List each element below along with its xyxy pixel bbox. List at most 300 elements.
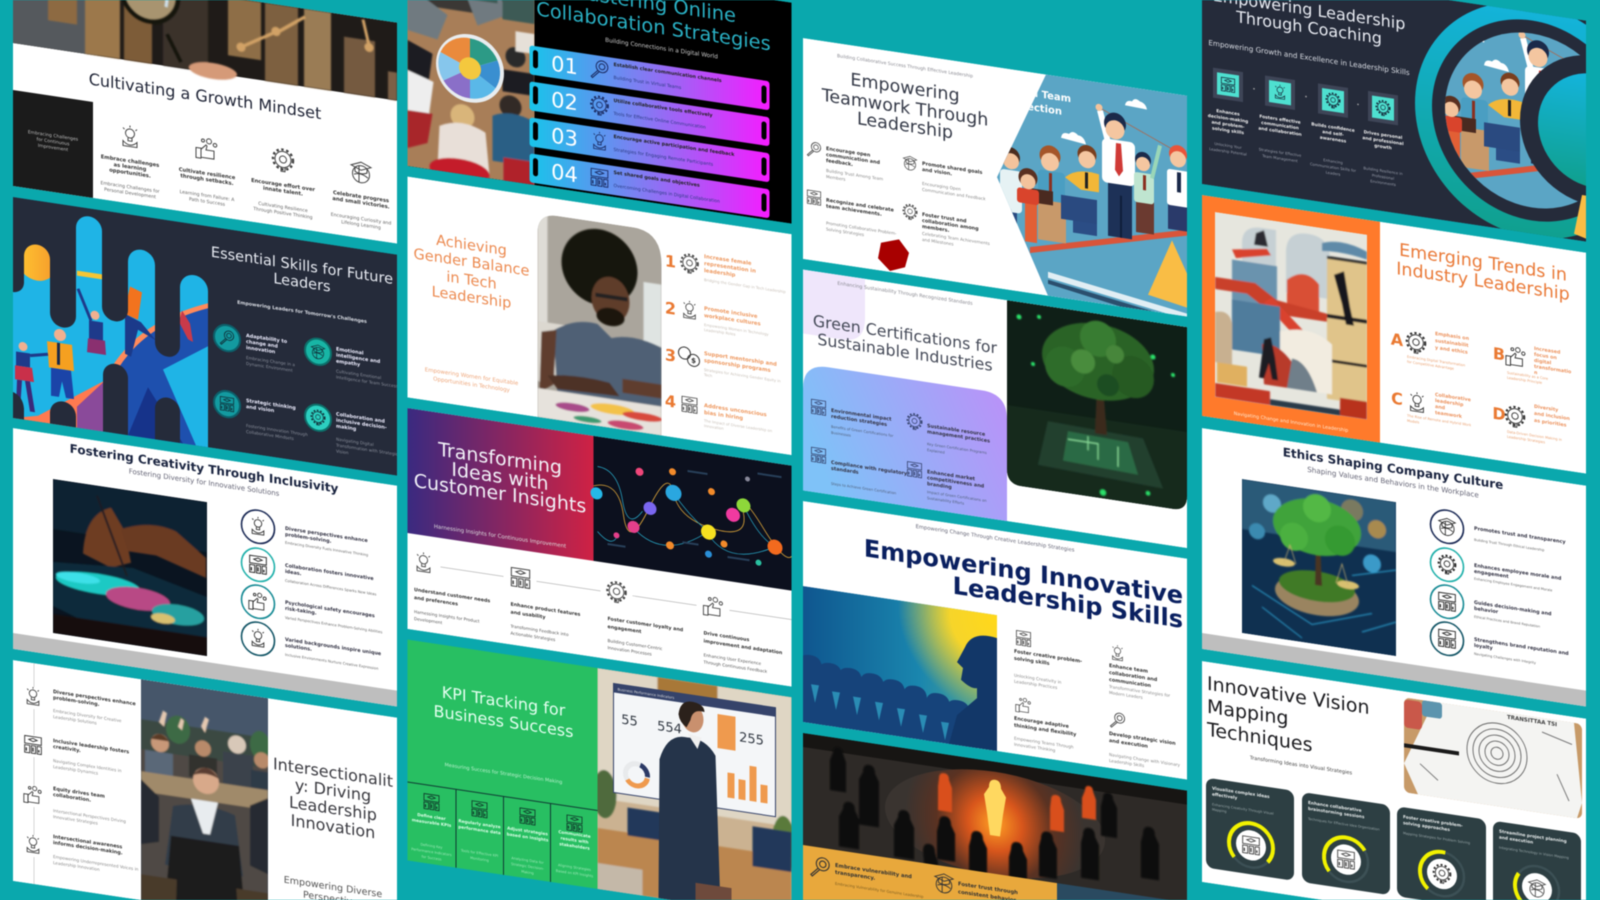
item: reputation <box>1430 620 1569 674</box>
card 2 <box>1302 792 1390 897</box>
title: Emerging Trends in <box>1399 241 1567 286</box>
item: trust and collaboration: Celebrating Team Achievements <box>922 231 990 246</box>
step 2: communication <box>1261 120 1299 132</box>
item: resilience: Cultivate resilience <box>179 167 236 181</box>
item A: A <box>1391 329 1404 350</box>
item: resilience: through setbacks. <box>180 173 234 187</box>
step 2: Fosters effective <box>1259 114 1301 126</box>
item 1: representation in <box>704 261 756 275</box>
item: collaboration: Navigating Digital <box>336 436 374 447</box>
item: inclusive leadership: creativity. <box>53 744 81 754</box>
item: morale: Enhances employee morale and <box>1474 563 1562 582</box>
subtitle: Empowering Growth and Excellence in Leadership Skills <box>1208 38 1410 77</box>
slide: Empowering Innovative Leadership Skills <box>798 500 1187 780</box>
item: strategic thinking: Strategic thinking <box>246 398 296 411</box>
item: product features: Actionable Strategies <box>511 630 555 642</box>
item A: Embracing Digital Transformation <box>1407 355 1465 367</box>
item: adaptability: Adaptability to <box>246 333 288 345</box>
bar 01: 01 <box>551 51 578 80</box>
item: growth challenges: Embracing Challenges for <box>100 180 160 195</box>
item: varied backgrounds <box>242 620 382 674</box>
item C: Models <box>1407 419 1419 425</box>
title: Gender Balance <box>414 245 529 280</box>
card 2: Enhance collaborative <box>1308 800 1362 814</box>
grid lines <box>408 782 598 889</box>
item: adaptive thinking: thinking and flexibility <box>1014 723 1077 738</box>
photo: vision map sketch: TRANSITTAA TSI <box>1507 715 1557 728</box>
title: Innovative Vision <box>1207 672 1369 719</box>
KPI column 1 <box>411 792 452 863</box>
item: equity: collaboration. <box>53 792 91 804</box>
illustration: climbing team <box>13 197 208 447</box>
bar 03: 03 <box>551 123 578 152</box>
item: psychological safety: Psychological safety encourages <box>285 600 375 619</box>
item: trust: Promotes trust and transparency <box>1474 526 1566 546</box>
title: Green Certifications for <box>813 311 998 358</box>
title: Ethics Shaping Company Culture <box>1283 445 1503 492</box>
item: growth challenges: Personal Development <box>104 187 156 200</box>
orange panel <box>1202 195 1380 443</box>
item: regulatory compliance: Compliance with regulatory <box>831 460 908 477</box>
item: trust and collaboration: collaboration among <box>922 218 979 232</box>
title: Leadership <box>289 792 377 825</box>
photo: man viewing dashboard: Business Performance Indicators <box>618 688 674 700</box>
dark rounded stripes <box>13 197 208 363</box>
card 1: Visualize complex ideas <box>1212 786 1270 800</box>
item: customer loyalty: engagement <box>608 624 642 635</box>
item: intersectional awareness: Intersectional awareness <box>53 834 122 850</box>
item C: teamwork <box>1435 410 1463 420</box>
step 4: Drives personal <box>1364 129 1403 141</box>
step 3: Builds confidence <box>1311 121 1355 134</box>
item C: The Rise of Remote and Hybrid Work <box>1406 414 1472 428</box>
bar 03: Strategies for Engaging Remote Participants <box>614 147 714 168</box>
item: environmental impact: Benefits of Green Certifications for <box>831 425 894 438</box>
item: effort: Through Positive Thinking <box>252 206 313 221</box>
step 2: Strategies for Effective <box>1259 148 1302 158</box>
item: product features: Transforming Feedback into <box>510 623 569 637</box>
item: collaboration <box>242 546 376 599</box>
KPI column 1: Define clear <box>417 812 447 821</box>
item: growth challenges: opportunities. <box>109 167 151 180</box>
bar 02: 02 <box>551 87 578 116</box>
item: market competitiveness: branding <box>927 481 952 491</box>
step 2: Team Management <box>1261 154 1298 163</box>
subtitle: Measuring Success for Strategic Decision Making <box>445 762 562 786</box>
KPI column 4: stakeholders <box>559 841 590 851</box>
step 1: solving skills <box>1212 126 1244 136</box>
slide: Trust and vulnerability <box>803 733 1187 900</box>
title: Sustainable Industries <box>817 330 993 375</box>
item: effort: innate talent. <box>263 186 303 197</box>
step 2 <box>1258 74 1307 165</box>
item: sustainable resources: management practices <box>927 429 990 445</box>
item: product features: Enhance product features <box>511 601 581 618</box>
card 2: brainstorming sessions <box>1308 806 1365 820</box>
item: strategic thinking: Fostering Innovation Through <box>246 423 308 437</box>
item: progress: Lifelong Learning <box>341 219 381 231</box>
item C: Collaborative <box>1435 392 1472 403</box>
image: silhouettes <box>798 585 997 751</box>
item C: leadership <box>1435 398 1464 408</box>
item: intersectional awareness: Empowering Underrepresented Voices in <box>53 854 139 872</box>
KPI column 2: Monitoring <box>470 856 489 863</box>
subtitle: Opportunities in Technology <box>433 376 511 394</box>
item: trust <box>1430 508 1566 561</box>
item: collaboration: Transformation with Strategic <box>335 442 399 457</box>
card 3 <box>1397 806 1486 900</box>
KPI column 1: Defining Key <box>420 842 443 850</box>
item: strategic vision <box>1109 712 1180 774</box>
item: shared goals: Encouraging Open <box>922 181 961 192</box>
item: open communication <box>807 141 883 188</box>
item: collaboration <box>304 403 398 456</box>
card 1: effectively <box>1212 792 1238 801</box>
tagline: Enhancing Sustainability Through Recognized Standards <box>837 281 973 307</box>
item: effort <box>251 145 315 221</box>
gradient title panel: Customer Insights <box>414 469 586 518</box>
slide: Emerging Trends in Industry Leadership <box>1202 195 1586 474</box>
KPI column 3: Analyzing Data for <box>511 856 544 865</box>
item: open communication: Members <box>826 174 845 182</box>
item A: sustainabilit <box>1435 338 1469 349</box>
item: adaptive thinking: Innovative Thinking <box>1014 742 1056 753</box>
item: continuous improvement: Drive continuous <box>704 630 749 643</box>
item: market competitiveness: Impact of Green Certifications on <box>927 490 987 503</box>
circular illustration <box>1415 0 1600 264</box>
item: shared goals: Communication and Feedback <box>922 187 986 201</box>
illustration: team on a boat <box>803 38 1189 328</box>
item: team collaboration: Enhance team <box>1109 663 1148 675</box>
item A: for Competitive Advantage <box>1407 360 1454 371</box>
slide: Innovative Vision Mapping Techniques <box>1202 661 1586 900</box>
bar 04: Overcoming Challenges in Digital Collaboration <box>614 183 720 205</box>
item: trust and collaboration <box>903 204 990 252</box>
item D: Data-Driven Decision Making in <box>1507 430 1562 442</box>
KPI column 4: Communicate <box>558 829 591 839</box>
item: vulnerability: Embrace vulnerability and <box>835 863 912 880</box>
photo: glowing leader in a crowd <box>803 733 1187 900</box>
card 3: Foster creative problem- <box>1403 814 1463 829</box>
title: Industry Leadership <box>1396 259 1570 305</box>
dark side panel: for Continuous <box>37 137 70 148</box>
item: diverse perspectives: problem-solving. <box>53 695 100 708</box>
slide: Achieving Gender Balance <box>408 176 792 455</box>
item 4: The Impact of Diverse Leadership on <box>703 419 773 433</box>
slide: Online Collaboration Strategies <box>408 0 792 233</box>
item 4 <box>665 391 773 438</box>
step 4: growth <box>1374 143 1392 151</box>
item 4: 4 <box>665 391 676 412</box>
step 4: Environments <box>1370 179 1396 187</box>
item 4: bias in hiring <box>704 410 743 422</box>
photo: hand drawing on glowing tablet <box>53 479 207 656</box>
card 2: Techniques for Effective Idea Organization <box>1307 817 1380 832</box>
item B: Leadership Principle <box>1507 376 1542 385</box>
title: Intersectionalit <box>273 754 393 791</box>
title: Empowering Innovative <box>864 534 1183 610</box>
artwork: stairs and architecture <box>1215 212 1367 420</box>
item 3: sponsorship programs <box>704 358 771 374</box>
item A <box>1391 324 1470 373</box>
item: diverse perspectives: Diverse perspectives enhance <box>53 689 136 707</box>
item: diverse perspectives <box>26 686 136 725</box>
item: progress: Celebrate progress <box>333 190 389 204</box>
item: diverse perspectives: Diverse perspectives enhance <box>285 526 368 544</box>
panel: dark teal strip <box>1057 883 1187 900</box>
item: shared goals: and vision. <box>922 167 952 177</box>
item: customer loyalty: Innovation Processes <box>608 645 652 657</box>
item: decisions: behavior <box>1474 606 1499 616</box>
item D: Leadership Strategies <box>1507 435 1545 444</box>
item: equity: Intersectional Perspectives Driving <box>53 808 126 824</box>
title: Leadership Skills <box>953 572 1183 634</box>
item: trust: Foster trust through <box>958 881 1018 896</box>
title: Techniques <box>1206 718 1313 757</box>
item: creative problem solving: Leadership Practices <box>1014 679 1057 690</box>
item: customer loyalty: Building Customer-Centric <box>608 638 663 651</box>
item: intersectional awareness: informs decision-making. <box>53 840 123 856</box>
slide: Intersectionality <box>13 660 397 900</box>
step 3: Leaders <box>1326 171 1340 177</box>
item: morale: engagement <box>1474 569 1509 580</box>
subtitle: Transforming Ideas into Visual Strategies <box>1249 755 1352 777</box>
title: Leaders <box>273 270 331 296</box>
item: customer needs <box>414 551 504 634</box>
item D: and inclusion <box>1534 411 1570 422</box>
item: recognize achievements: Solving Strategies <box>826 226 864 237</box>
item: diverse perspectives: Embracing Diversity Fuels Innovative Thinking <box>285 541 368 557</box>
step 3: Communication Skills for <box>1310 162 1357 173</box>
item: continuous improvement: Through Continuous Feedback <box>703 659 768 674</box>
KPI column 2: performance data <box>458 824 501 835</box>
item D: D <box>1492 404 1506 425</box>
item: psychological safety: Varied Perspectives Enhance Problem-Solving Abilities <box>285 616 382 634</box>
item: adaptability <box>214 323 295 373</box>
slide: Fostering Creativity Through Inclusivity <box>13 428 397 707</box>
subtitle: Shaping Values and Behaviors in the Workplace <box>1307 465 1479 500</box>
step 3: and self- <box>1322 129 1344 138</box>
bar 04: Set shared goals and objectives <box>614 170 700 189</box>
card 4 <box>1493 821 1581 900</box>
item: strategic vision: and execution <box>1109 738 1148 750</box>
item: varied backgrounds: Inclusive Environments Nurture Creative Expression <box>285 653 378 671</box>
bar 02: Utilize collaborative tools effectively <box>614 98 713 119</box>
item: collaboration: Collaboration fosters innovative <box>285 563 374 582</box>
item: vulnerability: transparency. <box>835 870 875 882</box>
item 2: Empowering Women in Technology <box>704 323 769 337</box>
item 3: $ <box>691 356 696 365</box>
item: strategic vision: Leadership Skills <box>1109 758 1144 768</box>
item D <box>1492 398 1570 448</box>
item 2: Promote inclusive <box>704 306 758 320</box>
photo: man viewing dashboard: 554 <box>657 719 682 738</box>
item 3: Strategies for Achieving Gender Equity in <box>704 368 781 384</box>
KPI column 2: Regularly analyze <box>458 818 501 829</box>
bar 02 <box>530 81 770 146</box>
title: Fostering Creativity Through Inclusivity <box>70 442 338 496</box>
item: market competitiveness: competitiveness and <box>927 475 985 490</box>
item: recognize achievements <box>807 190 897 242</box>
bar 01 <box>530 45 770 110</box>
KPI column 3: Making <box>521 870 534 875</box>
item: morale: Enhancing Employee Engagement and Morale <box>1474 577 1552 593</box>
item: reputation: loyalty <box>1474 643 1493 652</box>
gradient panel <box>803 364 1007 521</box>
title: Empowering <box>850 70 960 106</box>
card 3: Mapping Strategies for Problem Solving <box>1403 831 1470 845</box>
grey footer band <box>13 633 397 707</box>
step 4 <box>1362 90 1404 188</box>
KPI column 3: Adjust strategies <box>507 825 548 837</box>
KPI column 3: based on insights <box>507 831 549 843</box>
item: trust <box>935 873 1018 900</box>
item: environmental impact <box>811 399 894 444</box>
item: adaptive thinking: Encourage adaptive <box>1014 716 1069 730</box>
item: environmental impact: reduction strategies <box>831 414 887 428</box>
item 1 <box>665 248 786 294</box>
item: team collaboration: collaboration and <box>1109 670 1158 683</box>
item: collaboration: Collaboration and <box>336 411 385 425</box>
orange panel: Navigating Change and Innovation in Leadership <box>1234 411 1348 434</box>
item: creative problem solving <box>1014 630 1082 694</box>
item: inclusive leadership <box>23 734 130 776</box>
KPI column 4: Based on KPI Insights <box>556 869 593 878</box>
item: emotional intelligence <box>305 337 398 389</box>
bar 01: Building Trust in Virtual Teams <box>614 75 682 91</box>
item B: focus on <box>1534 352 1557 361</box>
subtitle: Empowering Leaders for Tomorrow's Challenges <box>237 300 367 325</box>
item: creative problem solving: solving skills <box>1014 656 1050 667</box>
step 1: Enhances <box>1216 108 1240 118</box>
slide: Empowering Teamwork Through Leadership <box>803 38 1189 328</box>
item: customer loyalty <box>607 581 696 663</box>
network data image <box>590 435 794 591</box>
item: strategic thinking: and vision <box>246 404 275 414</box>
photo: tree on circuit board <box>1007 300 1187 511</box>
item: open communication: Building Trust Among Team <box>826 168 883 182</box>
step 1: Leadership Potential <box>1209 147 1247 157</box>
bar 03 <box>530 117 770 182</box>
item: equity: Equity drives team <box>53 786 105 800</box>
red hexagon <box>878 236 909 274</box>
item: open communication: Encourage open <box>826 146 871 159</box>
item: team collaboration <box>1108 644 1170 704</box>
item: adaptability: Dynamic Environment <box>246 361 293 373</box>
item: product features: and usability <box>511 609 546 621</box>
item B <box>1493 340 1572 389</box>
item: decisions <box>1430 583 1552 634</box>
item: resilience: Learning from Failure: A <box>180 189 235 203</box>
item: collaboration: inclusive decision- <box>336 417 387 431</box>
item: team collaboration: Modern Leaders <box>1109 690 1143 700</box>
item: collaboration: making <box>336 423 357 433</box>
item: customer needs: Harnessing Insights for Product <box>414 609 480 624</box>
card 4: and execution <box>1499 835 1533 846</box>
item: customer needs: Understand customer needs <box>414 587 490 604</box>
subtitle: Building Connections in a Digital World <box>605 38 718 61</box>
item: emotional intelligence: intelligence and <box>336 352 381 365</box>
item: reputation: Strengthens brand reputation and <box>1474 637 1569 657</box>
item: varied backgrounds: Varied backgrounds inspire unique <box>285 637 382 657</box>
gradient title panel: Ideas with <box>451 458 549 495</box>
item 3 <box>665 344 781 389</box>
item D: as priorities <box>1534 418 1567 429</box>
item: diverse perspectives: Embracing Diversity for Creative <box>53 708 122 723</box>
item: customer needs: and preferences <box>414 595 458 608</box>
item B: digital <box>1534 358 1552 366</box>
title: Essential Skills for Future <box>211 244 393 288</box>
step 4: Building Resilience in <box>1363 166 1403 176</box>
item B: n <box>1534 371 1538 376</box>
photo: man at a table <box>538 196 662 436</box>
item 3: Tech <box>703 373 713 378</box>
item: resilience: Path to Success <box>189 196 226 208</box>
card 3: solving approaches <box>1403 820 1450 833</box>
item: market competitiveness: Sustainability Efforts <box>927 496 964 506</box>
item: collaboration: ideas. <box>285 569 302 577</box>
item: collaboration: Vision <box>336 448 349 455</box>
item 4: Address unconscious <box>704 403 767 418</box>
title: y: Driving <box>295 775 371 806</box>
item 3: Support mentorship and <box>704 351 777 368</box>
lilac corner blob <box>803 270 865 343</box>
item: adaptability: Embracing Change in a <box>246 355 295 367</box>
item B: Sustainability as a Core <box>1507 371 1548 381</box>
item: intersectional awareness: Leadership Innovation <box>53 860 100 872</box>
title: Teamwork Through <box>821 86 988 131</box>
item: decisions: Ethical Practices and Brand Reputation <box>1474 615 1540 629</box>
KPI column 2 <box>458 799 501 864</box>
item: recognize achievements: team achievements. <box>826 203 882 218</box>
gradient title panel: Harnessing Insights for Continuous Improvement <box>434 524 566 550</box>
photo: tree and balance scales <box>1242 479 1396 656</box>
dark side panel <box>13 90 93 198</box>
KPI column 4: results with <box>560 835 589 845</box>
item C: C <box>1391 388 1403 409</box>
title: in Tech <box>446 268 497 293</box>
item 2 <box>665 297 769 342</box>
item: team collaboration: Transformative Strategies for <box>1108 684 1170 698</box>
item: growth challenges: as learning <box>114 162 147 173</box>
title: Leadership <box>857 109 953 143</box>
item: market competitiveness <box>907 462 987 509</box>
card 4: Integrating Technology in Vision Mapping <box>1499 846 1569 860</box>
item: regulatory compliance: standards <box>831 466 859 476</box>
KPI column 1: Performance Indicators <box>411 847 452 857</box>
step 1: and problem- <box>1211 119 1245 130</box>
item: vulnerability: Embracing Vulnerability for Genuine Leadership <box>835 882 924 899</box>
item: customer loyalty: Foster customer loyalty and <box>608 616 684 633</box>
item 4: Innovation <box>704 424 724 431</box>
item: regulatory compliance: Steps to Achieve Green Certification <box>831 482 896 495</box>
title: Business Success <box>434 701 573 741</box>
item: progress: Encouraging Curiosity and <box>331 212 391 227</box>
item: team collaboration: communication <box>1109 677 1152 689</box>
subtitle: Fostering Diversity for Innovative Solutions <box>129 466 280 498</box>
item: diverse perspectives: problem-solving. <box>285 532 332 545</box>
card 1: Mapping <box>1212 808 1227 814</box>
item: creative problem solving: Foster creative problem- <box>1014 649 1082 665</box>
item: sustainable resources: Sustainable resource <box>927 423 986 438</box>
item B: transformatio <box>1534 364 1572 375</box>
item: strategic vision: Navigating Change with Visionary <box>1109 752 1180 768</box>
step 4: and professional <box>1362 135 1404 147</box>
step 1 <box>1208 67 1255 158</box>
item: emotional intelligence: empathy <box>336 358 361 368</box>
KPI column 4: Aligning Strategies <box>558 863 591 872</box>
item 3: 3 <box>665 345 676 366</box>
